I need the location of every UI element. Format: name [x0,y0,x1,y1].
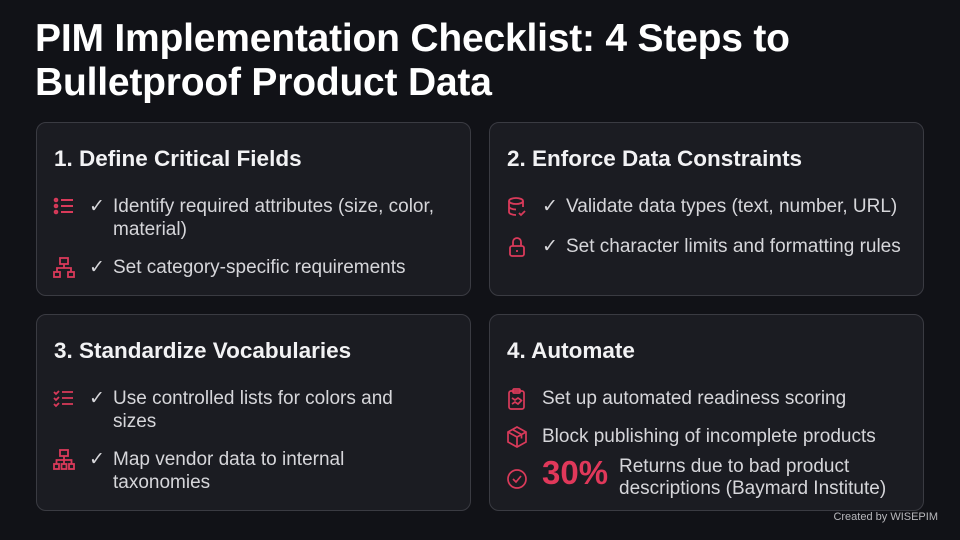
item: data types: Validate data types (text, number, URL) [566,196,897,217]
stat: 30% returns: Returns due to bad product [619,456,849,477]
item: map vendor data: Map vendor data to internal [113,449,344,470]
panel: enforce data constraints [489,122,924,296]
item: attributes [54,196,434,240]
title: PIM Implementation Checklist: 4 Steps to [35,17,790,60]
item: attributes: Identify required attributes (size, color, [113,196,434,217]
item: map vendor data [53,449,344,493]
item: controlled lists: ✓ [89,388,105,409]
credit: Created by WISEPIM [833,511,938,523]
item: character limits: ✓ [542,236,558,257]
item: data types: ✓ [542,196,558,217]
panel: standardize vocabularies [36,314,471,511]
heading: 1. Define Critical Fields [54,146,302,171]
item: category: Set category-specific requirements [113,257,406,278]
item: attributes: material) [113,219,187,240]
heading: 2. Enforce Data Constraints [507,146,802,171]
title [35,17,790,104]
heading: 4. Automate [507,338,635,363]
item: block publishing: Block publishing of incomplete products [542,426,876,447]
panel: automate [489,314,924,511]
item: controlled lists [53,388,393,432]
item: character limits: Set character limits and formatting rules [566,236,901,257]
title: Bulletproof Product Data [35,61,492,104]
item: controlled lists: sizes [113,411,156,432]
item: category: ✓ [89,257,105,278]
item: readiness scoring: Set up automated readiness scoring [542,388,846,409]
stat: 30% returns: descriptions (Baymard Institute) [619,478,886,499]
stat: 30% returns: 30% [542,454,608,491]
item: controlled lists: Use controlled lists for colors and [113,388,393,409]
panel: define critical fields [36,122,471,296]
stat: 30% returns [507,454,886,499]
item: map vendor data: taxonomies [113,472,210,493]
heading: 3. Standardize Vocabularies [54,338,351,363]
item: map vendor data: ✓ [89,449,105,470]
item: attributes: ✓ [89,196,105,217]
